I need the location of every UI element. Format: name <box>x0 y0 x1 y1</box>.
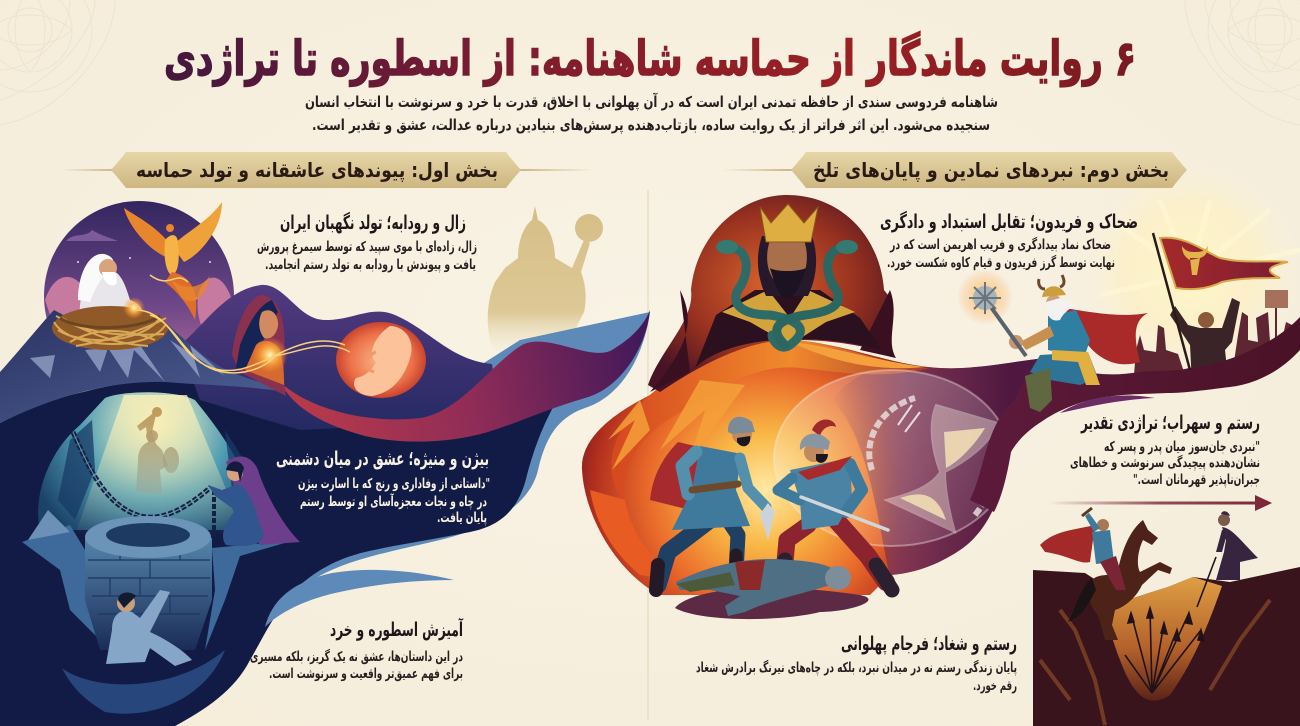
illustration: Kaveh banner <box>1153 233 1288 370</box>
snake right <box>777 248 847 345</box>
text: myth and wisdom <box>250 617 463 682</box>
illustration: blue wave flake <box>265 570 454 627</box>
illustration: unborn Rostam <box>336 322 426 398</box>
illustration: purple wave flake right <box>1060 396 1155 413</box>
text: Zahhak and Fereydun: نهایت توسط گرز فریدون و قیام کاوه شکست خورد. <box>887 254 1115 271</box>
illustration: right warrior <box>778 420 892 590</box>
text: Bijan and Manijeh: پایان یافت. <box>437 510 487 526</box>
text: Zahhak and Fereydun: ضحاک و فریدون؛ تقابل استبداد و دادگری <box>880 210 1138 233</box>
illustration: battlefield shadow <box>675 588 869 619</box>
section banner: part one: بخش اول: پیوندهای عاشقانه و تولد حماسه <box>136 158 498 183</box>
illustration: purple hill of Rudabeh <box>180 285 500 430</box>
illustration: Zahhak <box>648 195 896 392</box>
illustration: rebel leader <box>1170 298 1240 384</box>
illustration: horse and rider <box>1040 508 1172 640</box>
illustration: the well <box>85 516 212 650</box>
illustration: glass sphere with hourglass <box>774 370 1010 546</box>
text: Zal and Rudabeh: یافت و پیوندش با رودابه به تولد رستم انجامید. <box>265 257 476 273</box>
text: myth and wisdom: در این داستان‌ها، عشق نه یک گریز، بلکه مسیری <box>250 648 463 665</box>
intro paragraph <box>305 93 998 135</box>
illustration: Fereydun's mace <box>957 269 1026 356</box>
arrow <box>1048 495 1272 511</box>
illustration: Shaghad <box>1216 511 1258 580</box>
illustration: navy cave backdrop <box>0 381 560 726</box>
illustration: cave ledges <box>22 510 295 714</box>
illustration: golden threads <box>135 275 350 373</box>
section banner: part two: بخش دوم: نبردهای نمادین و پایان‌های تلخ <box>813 158 1169 183</box>
illustration: mountain <box>0 310 288 423</box>
intro paragraph: سنجیده می‌شود. این اثر فراتر از یک روایت ساده، بازتاب‌دهنده پرسش‌های بنیادین درباره عدالت، عشق و تقدیر است. <box>312 116 990 135</box>
illustration: Fereydun with mace <box>1009 275 1148 412</box>
illustration: Zal in the nest <box>52 254 168 350</box>
illustration: warrior in the light <box>136 407 179 494</box>
illustration: lit cave <box>38 392 250 535</box>
text: Zahhak and Fereydun <box>880 210 1138 271</box>
center divider <box>648 190 649 720</box>
illustration: warrior silhouette <box>488 206 603 358</box>
text: Zahhak and Fereydun: ضحاک نماد بیدادگری و فریب اهریمن است که در <box>889 236 1111 253</box>
text: Zal and Rudabeh: زال، زاده‌ای با موی سپید که توسط سیمرغ پرورش <box>257 239 477 255</box>
illustration: phoenix <box>124 202 222 320</box>
illustration: red ribbon <box>280 310 650 442</box>
text: Bijan and Manijeh: در چاه و نجات معجزه‌آسای او توسط رستم <box>300 493 487 510</box>
illustration: chain <box>73 432 214 538</box>
text: Rostam and Shaghad: رستم و شغاد؛ فرجام پهلوانی <box>841 633 1017 655</box>
text: Zal and Rudabeh <box>257 211 477 273</box>
text: Bijan and Manijeh: "داستانی از وفاداری و رنج که با اسارت بیژن <box>298 476 490 492</box>
illustration: spears <box>1125 557 1216 693</box>
text: Rostam and Shaghad: پایان زندگی رستم نه در میدان نبرد، بلکه در چاه‌های نیرنگ برادرش شغاد <box>696 659 1017 676</box>
intro paragraph: شاهنامه فردوسی سندی از حافظه تمدنی ایران است که در آن پهلوانی با اخلاق، قدرت با خرد و سرنوشت با انتخاب انسان <box>305 93 998 112</box>
text: Bijan and Manijeh <box>276 448 490 526</box>
corner ornament: top left <box>0 0 115 125</box>
text: myth and wisdom: برای فهم عمیق‌تر واقعیت و سرنوشت است. <box>269 666 463 682</box>
snake left <box>727 248 800 347</box>
illustration: maroon ribbon right <box>970 317 1300 512</box>
text: Zal and Rudabeh: زال و رودابه؛ تولد نگهبان ایران <box>280 211 466 234</box>
text: Bijan and Manijeh: بیژن و منیژه؛ عشق در میان دشمنی <box>276 448 489 470</box>
illustration: flames and battle backdrop <box>582 339 1045 595</box>
illustration: Bijan in the pit <box>106 590 192 666</box>
corner ornament: top right <box>1185 0 1300 125</box>
illustration: left warrior <box>650 417 775 590</box>
illustration: Rudabeh <box>232 295 288 396</box>
section banner: part two <box>722 152 1187 188</box>
illustration: sunburst <box>1070 155 1300 395</box>
text: Rostam and Sohrab <box>1070 412 1260 488</box>
illustration: crowd <box>1134 290 1300 375</box>
text: myth and wisdom: آمیزش اسطوره و خرد <box>330 617 463 641</box>
illustration: blue outer ribbon left <box>130 312 650 726</box>
illustration: Manijeh <box>208 456 300 546</box>
illustration: mythic sky circle <box>44 201 234 391</box>
section banner: part one <box>60 152 595 188</box>
illustration: fallen warrior <box>676 559 851 616</box>
illustration: chasm <box>1033 567 1300 726</box>
text: Rostam and Shaghad <box>696 633 1017 694</box>
text: Rostam and Shaghad: رقم خورد. <box>973 678 1017 694</box>
